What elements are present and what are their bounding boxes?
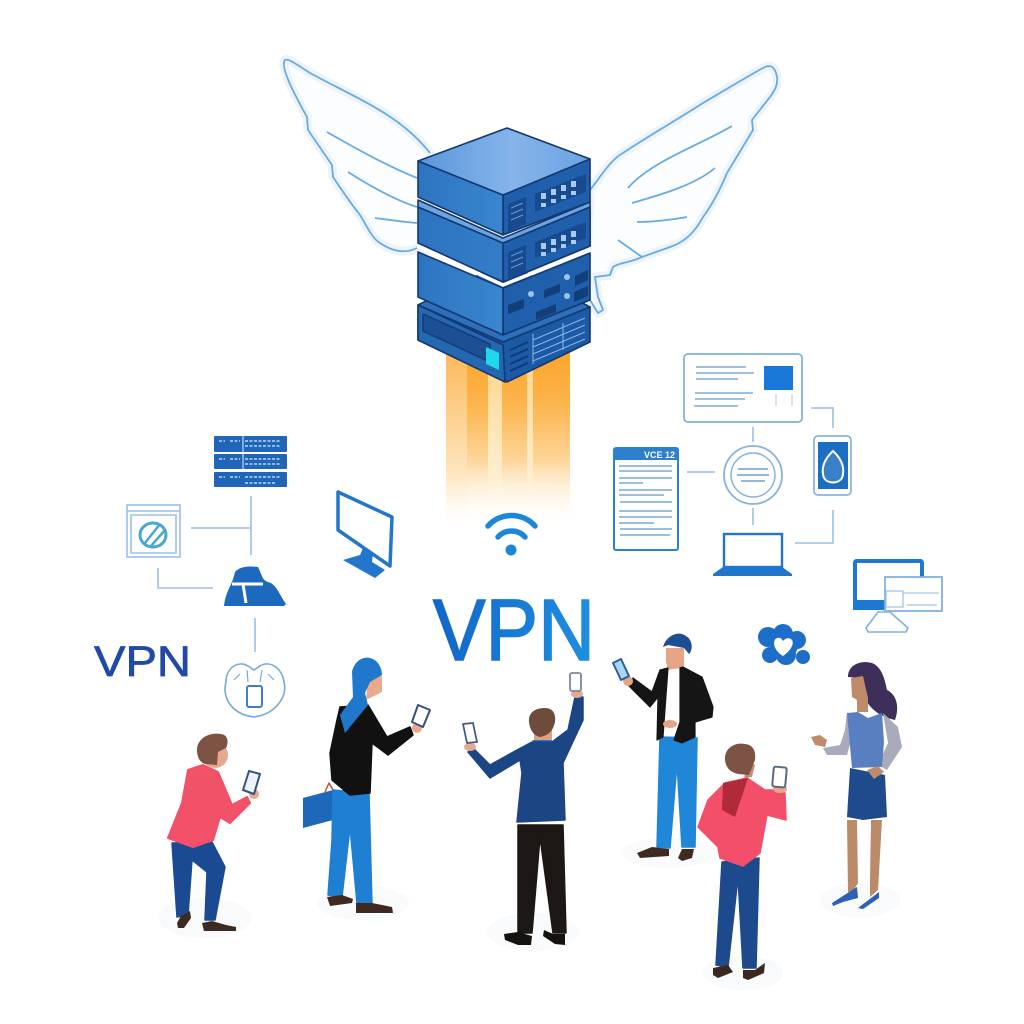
right wing (585, 66, 777, 313)
hand at waist (663, 720, 677, 728)
heels (832, 887, 879, 909)
shirt (698, 778, 786, 866)
person 2: black top with briefcase (303, 658, 430, 920)
skirt (847, 768, 887, 820)
head (744, 760, 755, 778)
face (366, 676, 382, 700)
connector lines (158, 496, 255, 652)
shoes (177, 911, 236, 931)
jeans (657, 737, 697, 848)
server unit 2 (418, 200, 590, 282)
hair (848, 662, 897, 720)
vest (847, 712, 884, 768)
gap between units 2 and 3 (418, 246, 590, 285)
sleeves (823, 712, 902, 770)
trousers (172, 842, 225, 920)
hands and phones (464, 743, 476, 751)
shoes (713, 963, 765, 980)
legs (847, 820, 882, 897)
face and neck (851, 676, 868, 712)
hair (663, 634, 692, 654)
laptop (713, 534, 792, 576)
hand and phone (412, 723, 422, 733)
scarf (722, 778, 748, 817)
server stack (418, 128, 590, 382)
rocket exhaust beam (446, 350, 570, 528)
trousers (518, 825, 566, 933)
trousers (328, 790, 372, 905)
head (202, 742, 228, 768)
icon: head outline with phone (225, 664, 285, 717)
person 6: woman in vest and skirt (811, 662, 902, 917)
secondary VPN label: VPN (94, 638, 191, 686)
person 1: red hoodie (159, 734, 260, 938)
document panel (614, 448, 678, 550)
connector lines (687, 408, 833, 543)
server unit 1 (418, 128, 590, 235)
phone fingerprint icon (814, 436, 851, 495)
hoodie (168, 765, 250, 847)
monitor and window (853, 561, 942, 632)
hand and phone (249, 789, 259, 799)
hand and phone (623, 676, 633, 686)
right network diagram (614, 354, 942, 665)
shoes (637, 847, 694, 861)
face (666, 648, 684, 670)
server unit 3 (418, 252, 590, 335)
left network diagram (127, 436, 287, 717)
shield circle icon (724, 446, 782, 504)
icon: blue cloud gateway (224, 567, 286, 606)
collar (532, 740, 552, 746)
shoes (327, 895, 393, 913)
blazer (628, 667, 713, 743)
head (534, 725, 552, 743)
document panel: VCE 12 (644, 450, 675, 460)
icon: blue cloud badge (758, 624, 810, 665)
white shirt (663, 668, 682, 735)
trousers (716, 858, 759, 968)
hand and phone (773, 785, 787, 793)
server unit 4 (418, 262, 590, 382)
person 4: black blazer and blue jeans (613, 634, 713, 868)
info card (684, 354, 802, 422)
icon: desktop monitor (338, 492, 392, 578)
icon: server rack (214, 436, 287, 487)
briefcase (303, 790, 333, 828)
jacket (468, 697, 583, 822)
left wing (284, 60, 430, 251)
hair (340, 658, 382, 733)
person 3: navy jacket back view (463, 673, 583, 951)
icon: browser window with globe (127, 505, 180, 557)
person 5: pink shirt (698, 744, 787, 990)
shoes (504, 930, 565, 945)
torso (330, 705, 413, 795)
hands (811, 735, 884, 779)
icon: wifi signal (488, 516, 535, 556)
main VPN title: VPN (433, 582, 595, 679)
